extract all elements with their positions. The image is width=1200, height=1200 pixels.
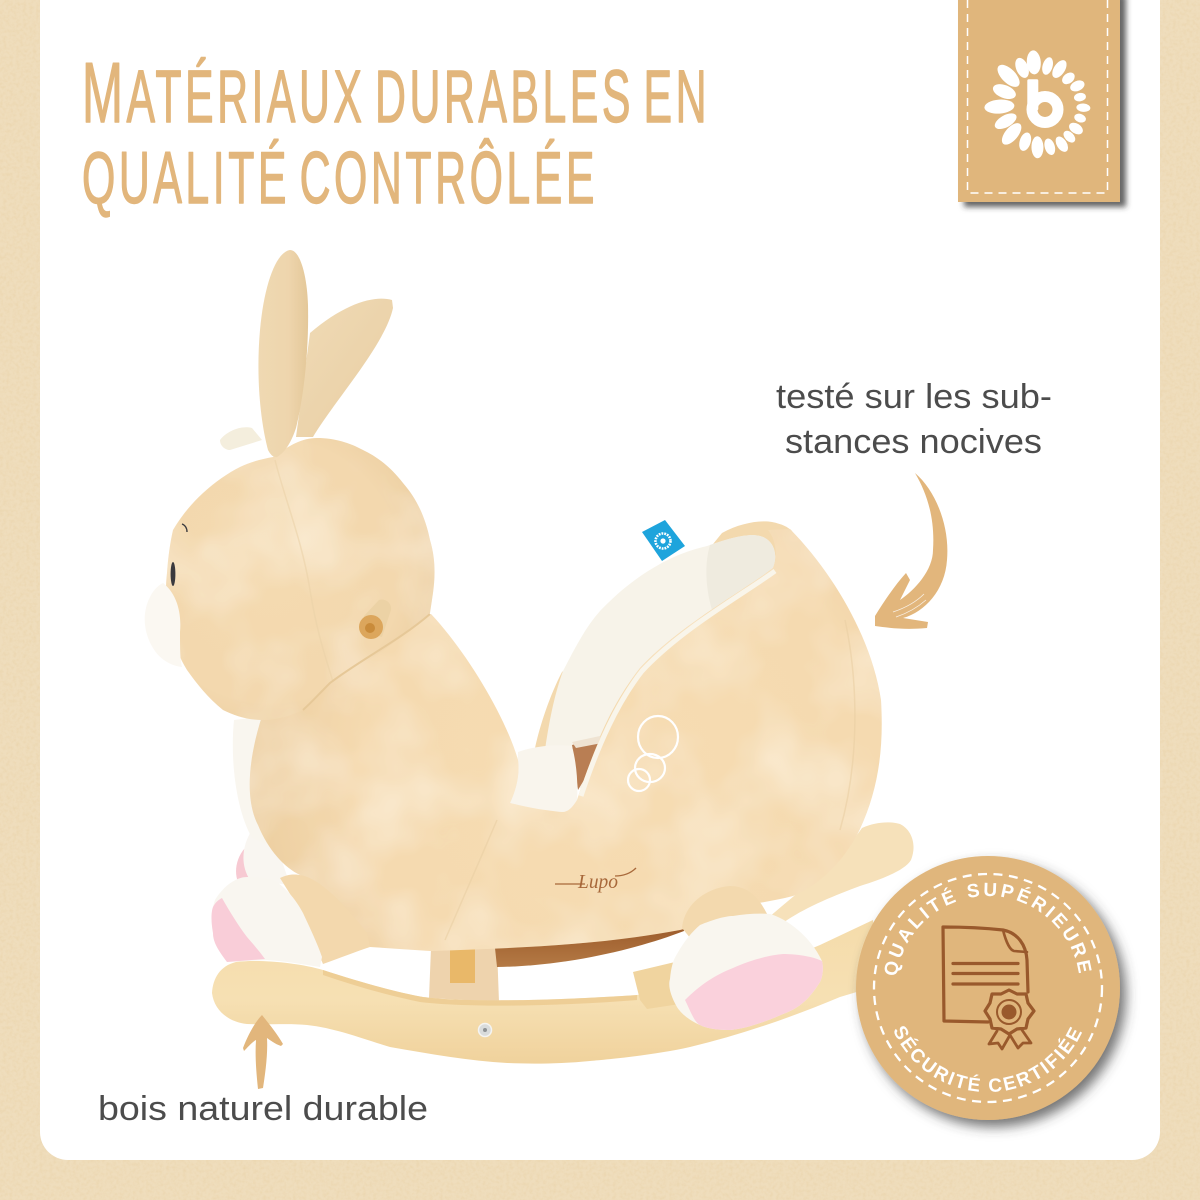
plush head (166, 438, 435, 720)
neck seam (303, 614, 430, 710)
rear leg and foot (669, 886, 823, 1030)
nose (145, 583, 182, 667)
peg block (633, 962, 680, 1009)
seat back cushion (545, 535, 775, 790)
safety belt (572, 736, 605, 790)
text: durable natural wood: bois naturel durable (98, 1090, 428, 1128)
badge text top: QUALITÉ SUPÉRIEURE (884, 882, 1092, 975)
text: tested for harmful substances: testé sur les sub- (776, 378, 1052, 416)
wooden support (429, 948, 499, 1002)
brown underside (495, 925, 685, 967)
near rocker board (212, 920, 880, 1064)
front ear (258, 250, 308, 457)
head seam (275, 460, 333, 682)
eye and brow (171, 524, 187, 586)
ribbon on head (220, 427, 262, 450)
icon: certificate (943, 927, 1034, 1049)
embroidered rings (628, 716, 678, 791)
icon: brand flower logo (984, 50, 1091, 158)
rocking rabbit product (145, 250, 914, 1064)
embroidered signature: Lupo (577, 871, 618, 893)
embroidered signature (555, 868, 636, 893)
text: tested for harmful substances (776, 378, 1052, 461)
title: MATÉRIAUX DURABLES EN (82, 46, 710, 141)
seat cushion (505, 745, 577, 812)
belly strip (233, 715, 280, 850)
text: tested for harmful substances: stances nocives (785, 423, 1042, 461)
back ear (296, 299, 393, 437)
quality badge (852, 854, 1136, 1136)
blue brand label (642, 520, 685, 561)
badge text bottom: SÉCURITÉ CERTIFIÉE (894, 1026, 1082, 1092)
far wooden rail (760, 822, 914, 925)
front leg and foot (212, 874, 370, 967)
title: QUALITÉ CONTRÔLÉE (82, 138, 598, 219)
brand tag (958, 0, 1120, 202)
title (82, 46, 710, 219)
seat rim trim (581, 571, 775, 796)
plush body (250, 529, 882, 951)
arrow: to wooden rocker (243, 1015, 283, 1089)
far front foot (236, 830, 290, 885)
seat back outer (535, 521, 800, 760)
arrow: to plush fabric (875, 473, 947, 629)
body seams (445, 620, 855, 940)
wooden handle peg (359, 599, 391, 639)
